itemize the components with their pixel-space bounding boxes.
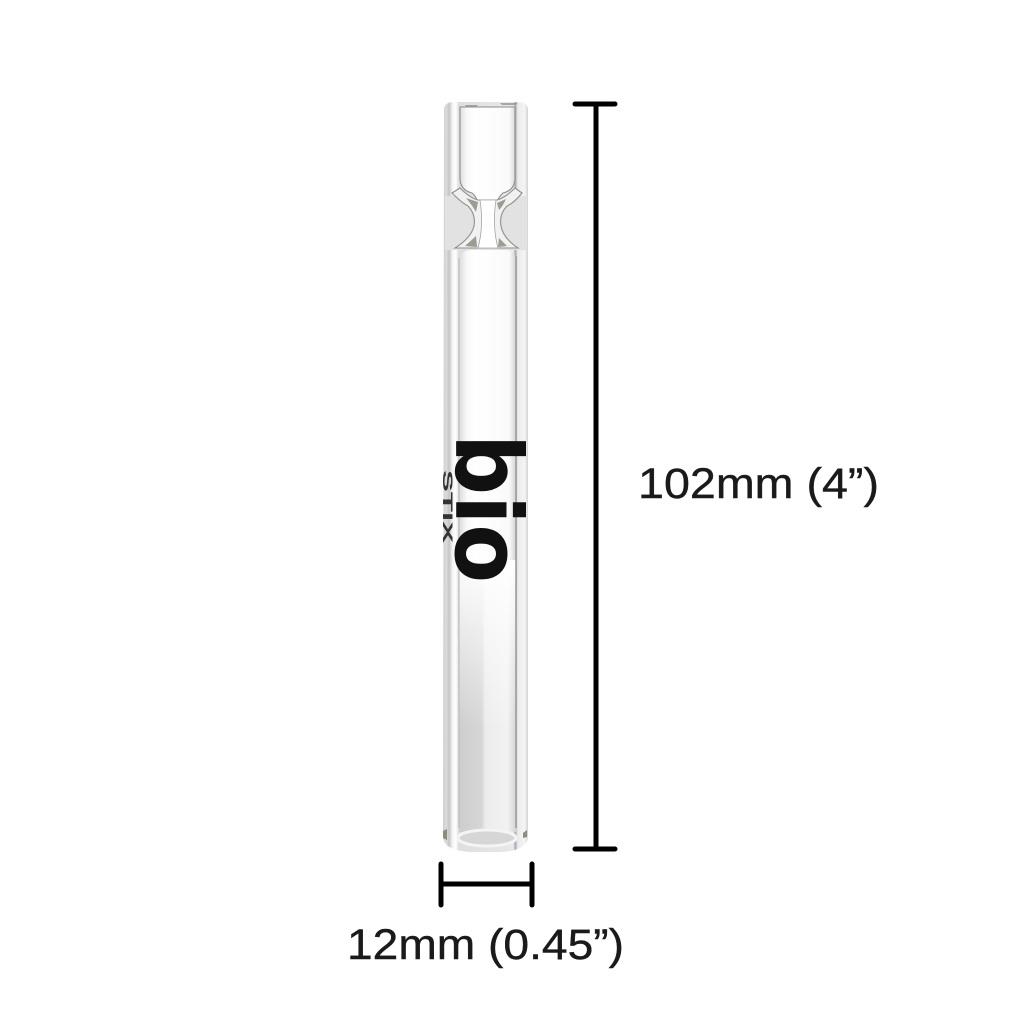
- chamber left wall: [458, 258, 460, 828]
- neck passage: [478, 200, 498, 248]
- width dimension line: [441, 864, 532, 905]
- chamber right wall: [515, 256, 517, 828]
- height label: 102mm (4”): [638, 460, 879, 508]
- bore fade: [459, 560, 516, 730]
- lower bore shading: [459, 560, 516, 832]
- logo: bio: bio: [434, 434, 541, 583]
- height dimension line: [575, 104, 615, 849]
- glass tube: [443, 102, 528, 852]
- rim shadow: [465, 103, 518, 107]
- tube body: [443, 102, 528, 852]
- neck background panes: [445, 196, 527, 250]
- hourglass neck outer glass: [452, 188, 522, 248]
- bottom opening: [458, 830, 516, 846]
- upper chamber: [460, 107, 515, 204]
- lower chamber: [459, 250, 516, 828]
- logo: STIX: STIX: [440, 470, 456, 545]
- bottom edge marks: [443, 829, 527, 840]
- neck shadows: [465, 198, 507, 247]
- width label: 12mm (0.45”): [347, 921, 624, 969]
